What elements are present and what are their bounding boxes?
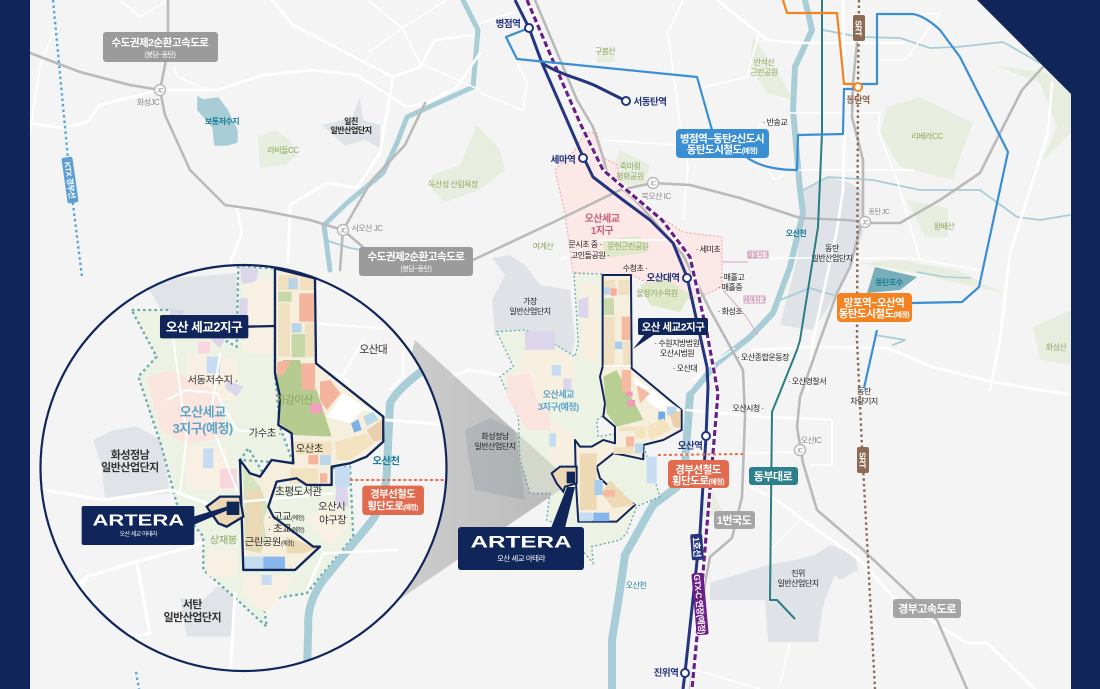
district 3 label [538, 388, 579, 412]
zoom: place names: 오산천 [372, 455, 399, 468]
industrial labels and place names: 동탄 [825, 243, 840, 253]
industrial labels and place names: 독산성 산림욕장 [428, 179, 479, 189]
zoom: crossing dashed road [350, 477, 447, 483]
zoom: crossing road label [362, 486, 424, 515]
industrial labels and place names: 문헌근린공원 [607, 241, 649, 251]
industrial labels and place names: 라비돌CC [267, 146, 299, 155]
industrial labels and place names: 차량기지 [850, 396, 878, 406]
zoom: place names: 화성정남 [111, 447, 150, 461]
label: Line 1 [690, 534, 704, 560]
zoom: place names: 3지구(예정) [173, 421, 233, 436]
industrial labels and place names: 보통저수지 [205, 116, 239, 126]
zoom circle [30, 260, 450, 680]
label: Gyeongbu Expressway: 경부고속도로 [898, 602, 956, 616]
industrial labels and place names: 여계산 [533, 241, 554, 251]
industrial labels and place names: 근린공원 [750, 67, 778, 77]
industrial labels and place names: 오산시청 · [732, 403, 764, 413]
JC and IC markers: IC [798, 448, 804, 454]
zoom: place names: 오산초 [296, 443, 323, 455]
industrial labels and place names: 일진 [344, 116, 358, 126]
industrial labels and place names: 죽미령 [620, 162, 640, 171]
zoom: place names: 서탄 [183, 598, 202, 611]
lower KTX dotted line [136, 672, 139, 689]
Seodongtan branch [542, 63, 626, 101]
label: Mangpo-Osan metro: 동탄도시철도(예정) [839, 307, 909, 320]
zoom: place names: · 초교(예정) [268, 523, 305, 535]
green areas [258, 37, 1071, 520]
industrial labels and place names: 진위 [791, 568, 805, 578]
zoom: place names: 상재봉 [210, 534, 237, 546]
label: Byeongjeom-Dongtan2 metro: 동탄도시철도(예정) [687, 143, 757, 156]
cone tint on the zone [519, 435, 560, 497]
label: crossing road [668, 460, 729, 488]
industrial labels and place names: 오산시법원 [660, 348, 694, 358]
station names [496, 18, 870, 679]
label: Dongbu-daero [749, 467, 798, 485]
label: crossing road: 횡단도로(예정) [672, 475, 724, 487]
zoom: district blocks [243, 275, 383, 569]
industrial labels and place names: · 세미초 [696, 245, 720, 254]
district 3 label: 3지구(예정) [538, 401, 579, 412]
zoom: Segyo 2 label: 오산 세교2지구 [166, 320, 243, 334]
label: Gyeongbu Expressway [893, 599, 961, 618]
industrial labels and place names: 북오산 IC [641, 191, 671, 201]
JC and IC markers: JC [157, 88, 164, 94]
zoom: KTX dotted line [80, 260, 138, 680]
industrial labels and place names: · 매홀고 [720, 272, 744, 282]
station names: 진위역 [654, 667, 678, 679]
JC and IC markers [154, 84, 870, 456]
industrial labels and place names: 동탄호수 [875, 277, 904, 287]
industrial labels and place names: 오산IC [801, 435, 822, 445]
industrial labels and place names: 문시초 중 · [568, 240, 602, 249]
zoom: place names: 일반산업단지 [101, 460, 159, 474]
industrial labels and place names: 일반산업단지 [330, 125, 372, 135]
label: ring expressway 1: 수도권제2순환고속도로 [112, 36, 209, 49]
zoom: Segyo 2 label [160, 315, 275, 338]
industrial labels and place names: 평화공원 [616, 171, 644, 181]
industrial labels and place names: 화성산 [1046, 342, 1067, 352]
zoom: place names [101, 344, 399, 624]
zoom: place names: · 고교(예정) [268, 512, 305, 523]
pink district: Osan Segyo 1 [555, 132, 722, 300]
industrial labels and place names: · 오산경찰서 [788, 376, 826, 386]
zoom: place names: 가수초 · [249, 428, 281, 440]
lake [867, 267, 917, 293]
label: SRT north [853, 15, 865, 41]
blue metro line [506, 28, 712, 130]
GTX-C line [527, 0, 718, 689]
JC and IC markers: IC [650, 182, 657, 188]
zoom: place names: 근린공원(예정) [245, 537, 294, 549]
pink sub-district boundary [722, 251, 770, 335]
label: Byeongjeom-Dongtan2 metro [676, 129, 769, 158]
industrial labels and place names: · 오산대 [673, 363, 697, 373]
pink sub-district boundary: 세마지구 [744, 296, 767, 304]
label: Byeongjeom-Dongtan2 metro: 병점역~동탄2신도시 [680, 132, 764, 145]
JC and IC markers: JC [862, 220, 869, 226]
industrial labels and place names: 물향기수목원 [636, 289, 678, 298]
zoom: place names: 오산대 [359, 344, 387, 356]
Dongbu-daero [770, 0, 822, 619]
zoom: place names: 초평도서관 [275, 486, 322, 498]
zoom: white roads [30, 277, 450, 680]
zoom: place names: 오산시 [318, 501, 345, 513]
label: Route 1 [714, 511, 755, 529]
label: Route 1: 1번국도 [717, 514, 752, 527]
label: SRT south [857, 447, 869, 473]
label: Segyo 2 district (main) [633, 318, 708, 349]
industrial labels and place names: 수청초 · [623, 264, 647, 273]
orange metro line [783, 0, 858, 84]
label: ring expressway 1 [103, 32, 218, 62]
zoom: crossing road label: 경부선철도 [370, 487, 416, 500]
zoom: place names: 서동저수지 · [187, 374, 238, 386]
industrial labels and place names: 오산세교 [585, 212, 620, 225]
rivers [324, 0, 1070, 689]
district 3 label: 오산세교 [543, 388, 574, 399]
label: GTX-C: GTX-C 연장(예정) [692, 574, 707, 635]
industrial labels and place names: 리베라CC [911, 132, 943, 141]
industrial labels and place names: 일반산업단지 [509, 306, 551, 316]
station names: 서동탄역 [634, 96, 666, 108]
blue metro line 3 [864, 330, 877, 388]
zoom: ARTERA label: 오산 세교 아테라 [120, 530, 158, 538]
zoom: place names: 가감이산 [276, 394, 314, 406]
station names: 오산대역 [647, 272, 679, 284]
connecting cone to zoom circle [400, 340, 550, 600]
KTX dotted line [53, 0, 82, 277]
label: Mangpo-Osan metro: 망포역~오산역 [844, 296, 904, 309]
label: crossing road: 경부선철도 [675, 463, 722, 476]
industrial labels and place names: 오산천 [626, 580, 646, 590]
zoom: district boundary [240, 268, 383, 570]
lake 2 [198, 97, 237, 145]
label: ring expressway 2 [359, 247, 473, 276]
label: Dongbu-daero: 동부대로 [754, 469, 793, 483]
station names: 병점역 [496, 18, 520, 30]
industrial labels and place names: · 수원지방법원 [654, 338, 700, 348]
JC and IC markers: JC [340, 228, 347, 234]
label: ring expressway 1: (봉담~동탄) [144, 50, 176, 59]
label: SRT south: SRT [858, 452, 868, 469]
industrial labels and place names: 동탄 JC [869, 207, 890, 216]
ARTERA callout (main): ARTERA [470, 534, 572, 552]
line 1 [515, 0, 708, 689]
zoom: crossing road label: 횡단도로(예정) [367, 500, 418, 512]
zoom: grey industrial zones [93, 273, 237, 637]
label: KTX [61, 156, 79, 204]
pink sub-district boundary: 벌말지구 [747, 251, 770, 259]
label: SRT north: SRT [854, 20, 864, 37]
pink district parks [602, 236, 690, 312]
industrial labels and place names: 1지구 [591, 225, 614, 237]
industrial labels and place names: 화성JC [137, 98, 160, 107]
zoom: highway stub [340, 260, 345, 283]
zoom: Segyo 3 zone [132, 267, 353, 627]
zoom: place names: 오산세교 [180, 405, 226, 420]
industrial labels and place names: · 화성초 [718, 307, 742, 316]
industrial labels and place names: 일반산업단지 [777, 578, 819, 588]
industrial labels and place names: 일반산업단지 [811, 253, 853, 263]
label: ring expressway 2: 수도권제2순환고속도로 [368, 250, 465, 263]
industrial labels and place names: 고인돌공원 · [571, 250, 609, 260]
label: KTX: KTX 경부선 [62, 161, 78, 199]
industrial labels and place names: 가장 [523, 296, 538, 306]
label: Line 1: 1호선 [691, 537, 703, 558]
ARTERA callout (main) [458, 487, 584, 570]
industrial labels and place names: 반석산 [754, 57, 775, 67]
industrial labels and place names: 화성정남 [481, 431, 510, 441]
industrial labels and place names: 왕배산 [934, 221, 955, 231]
SRT dotted line [857, 0, 875, 689]
zoom: place names: 일반산업단지 [163, 610, 221, 624]
site plan: Segyo districts (main map) [496, 272, 683, 566]
zoom: narrow river [328, 260, 335, 680]
stations [525, 24, 862, 677]
industrial labels and place names: 일반산업단지 [474, 441, 516, 451]
industrial labels and place names: · 반송교 [763, 118, 787, 127]
industrial labels and place names: 서오산 JC [351, 223, 383, 233]
zoom: Segyo 2 district [240, 268, 383, 570]
blue metro line 2 [745, 14, 1008, 303]
zoom: ARTERA label: ARTERA [92, 513, 185, 530]
industrial labels and place names: 구봉산 [595, 46, 616, 56]
industrial labels and place names: · 매홀중 [718, 282, 742, 292]
ARTERA callout (main): 오산 세교 아테라 [497, 553, 546, 563]
label: Mangpo-Osan metro [837, 293, 912, 322]
industrial labels and place names: 동탄 [857, 386, 872, 396]
station names: 오산역 [678, 440, 702, 452]
zoom: ARTERA parcel [207, 497, 243, 527]
crossing dashed road [658, 454, 743, 455]
station names: 동탄역 [846, 94, 870, 105]
industrial labels and place names [137, 46, 1067, 590]
zoom: ARTERA label [82, 506, 227, 545]
ARTERA site parcel [552, 467, 577, 492]
industrial labels and place names: · 오산종합운동장 [737, 352, 790, 362]
zoom: place names: 야구장 [319, 514, 347, 526]
label: Segyo 2 district (main): 오산 세교2지구 [642, 320, 705, 334]
label: ring expressway 2: (봉담~동탄) [400, 264, 432, 273]
station names: 세마역 [551, 154, 575, 166]
industrial labels and place names: 오산천 [786, 228, 806, 238]
zoom: river [307, 370, 423, 680]
zoom: land use [147, 267, 350, 613]
grey industrial zones [322, 97, 863, 642]
